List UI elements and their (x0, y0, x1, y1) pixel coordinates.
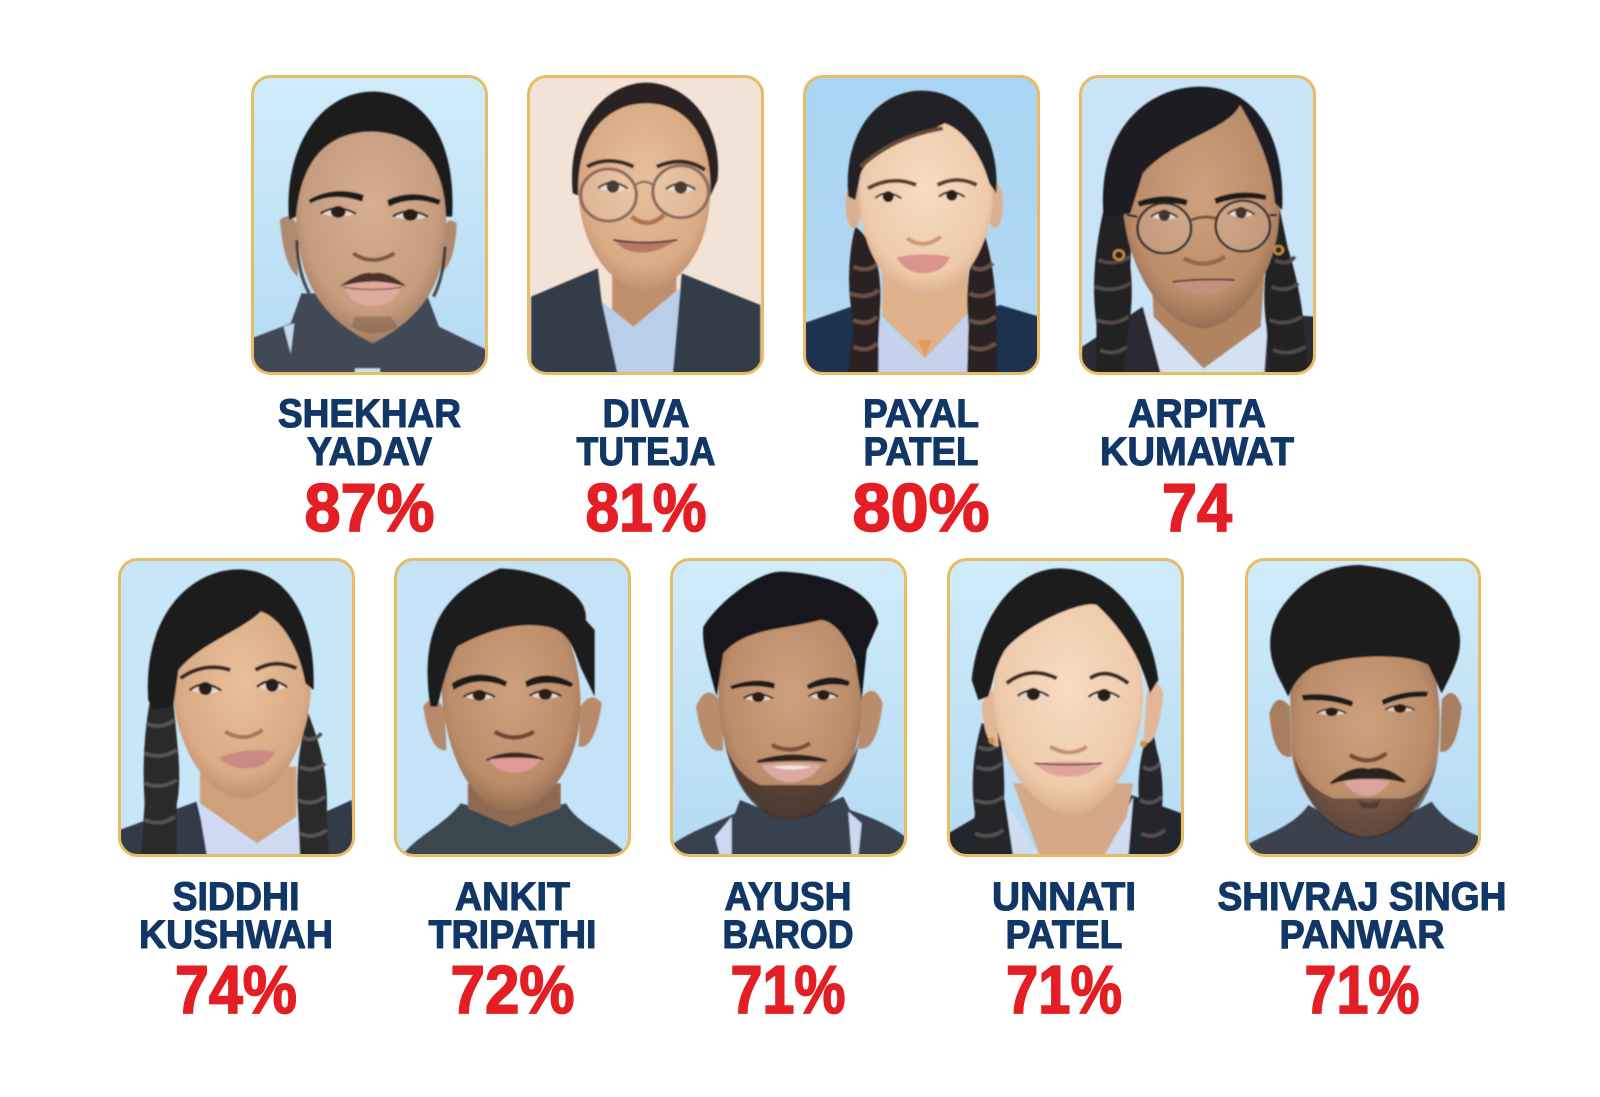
name: Unnati Patel: UNNATI (992, 875, 1136, 919)
name: Ankit Tripathi: TRIPATHI (428, 913, 596, 957)
name: Payal Patel (863, 392, 979, 474)
panel: Ayush Barod (671, 559, 906, 1028)
name: Shivraj Singh Panwar (1218, 875, 1506, 957)
name: Diva Tuteja: DIVA (602, 392, 690, 436)
photo: Payal Patel (804, 76, 1039, 374)
photo: Ankit Tripathi (395, 559, 630, 857)
score: 71%: 71% (1304, 952, 1420, 1028)
panel: Diva Tuteja (528, 76, 763, 546)
name: Arpita Kumawat: ARPITA (1128, 392, 1266, 436)
panel: Shivraj Singh Panwar (1218, 559, 1506, 1028)
photo: Shivraj Singh Panwar (1246, 559, 1480, 857)
name: Ankit Tripathi (428, 875, 596, 957)
name: Arpita Kumawat: KUMAWAT (1100, 430, 1294, 474)
score: 80%: 80% (852, 470, 990, 546)
panel: Ankit Tripathi (395, 559, 630, 1028)
panel: Unnati Patel (948, 559, 1183, 1028)
photo: Ayush Barod (671, 559, 906, 857)
name: Siddhi Kushwah: KUSHWAH (139, 913, 333, 957)
name: Ayush Barod (722, 875, 854, 957)
name: Siddhi Kushwah: SIDDHI (172, 875, 300, 919)
name: Ayush Barod: BAROD (722, 913, 854, 957)
score: 74: 74 (1162, 470, 1232, 546)
name: Payal Patel: PAYAL (863, 392, 979, 436)
score: 81%: 81% (586, 470, 706, 546)
name: Ayush Barod: AYUSH (724, 875, 852, 919)
name: Shivraj Singh Panwar: PANWAR (1280, 913, 1445, 957)
photo: Siddhi Kushwah (119, 559, 355, 857)
name: Shekhar Yadav (278, 392, 461, 474)
photo: Shekhar Yadav (251, 76, 487, 377)
name: Shivraj Singh Panwar: SHIVRAJ SINGH (1218, 875, 1506, 919)
name: Diva Tuteja (576, 392, 716, 474)
panel: Arpita Kumawat (1080, 76, 1315, 546)
score: 71%: 71% (730, 952, 846, 1028)
panel: Siddhi Kushwah (119, 559, 355, 1028)
name: Ankit Tripathi: ANKIT (455, 875, 570, 919)
photo: Diva Tuteja (528, 76, 763, 374)
score: 74%: 74% (175, 952, 297, 1028)
name: Arpita Kumawat (1100, 392, 1294, 474)
score: 87%: 87% (304, 470, 434, 546)
photo: Unnati Patel (948, 559, 1183, 857)
name: Unnati Patel (992, 875, 1136, 957)
name: Unnati Patel: PATEL (1006, 913, 1122, 957)
name: Shekhar Yadav: SHEKHAR (278, 392, 461, 436)
score: 71%: 71% (1006, 952, 1122, 1028)
name: Siddhi Kushwah (139, 875, 333, 957)
name: Payal Patel: PATEL (864, 430, 978, 474)
panel: Shekhar Yadav (251, 76, 487, 546)
panel: Payal Patel (804, 76, 1039, 546)
score: 72%: 72% (450, 952, 574, 1028)
photo: Arpita Kumawat (1080, 76, 1315, 374)
name: Diva Tuteja: TUTEJA (576, 430, 716, 474)
name: Shekhar Yadav: YADAV (307, 430, 432, 474)
